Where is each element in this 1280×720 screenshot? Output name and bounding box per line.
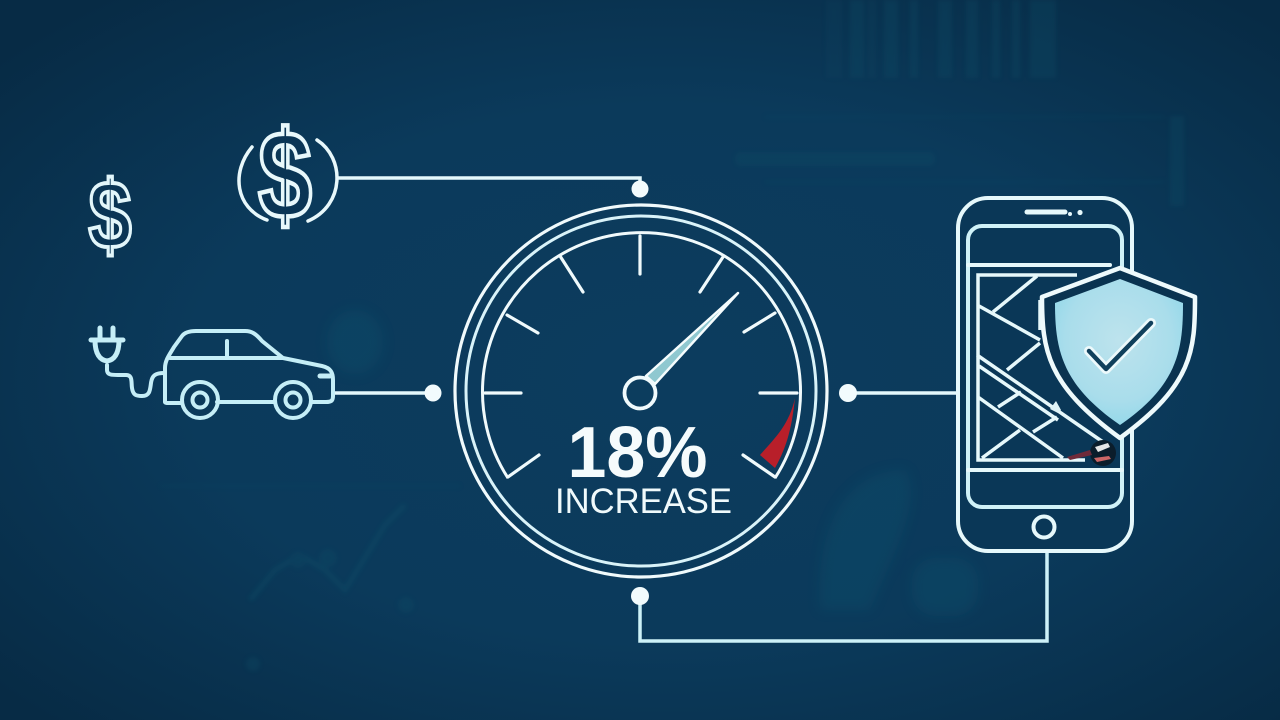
icon: dollar in circle: $ [258,105,312,245]
cable [107,365,164,396]
icon: small dollar: $ [88,161,132,269]
connector: gauge to phone [839,384,957,402]
car body [165,331,333,403]
gauge ticks [485,236,797,477]
connector: gauge bottom to phone [631,552,1047,641]
connector: dollar to gauge [336,178,648,198]
plug [91,328,123,361]
label: INCREASE [555,482,732,521]
needle [646,293,738,384]
value: 18% [568,413,708,493]
gauge rings [455,205,827,577]
map [977,275,1103,460]
screen [968,226,1122,507]
icon: electric car with plug [91,328,333,418]
headlight [320,374,330,378]
map marker [1050,401,1116,466]
connector: car to gauge [335,384,442,402]
shield with check [1042,268,1195,438]
gauge [455,205,827,577]
phone body [958,198,1132,551]
red zone [760,398,795,468]
home button [1034,516,1054,538]
phone [958,198,1132,551]
icon: dollar in circle [239,105,337,245]
needle hub [624,378,656,408]
wheels [182,382,218,418]
speaker [1027,210,1065,214]
